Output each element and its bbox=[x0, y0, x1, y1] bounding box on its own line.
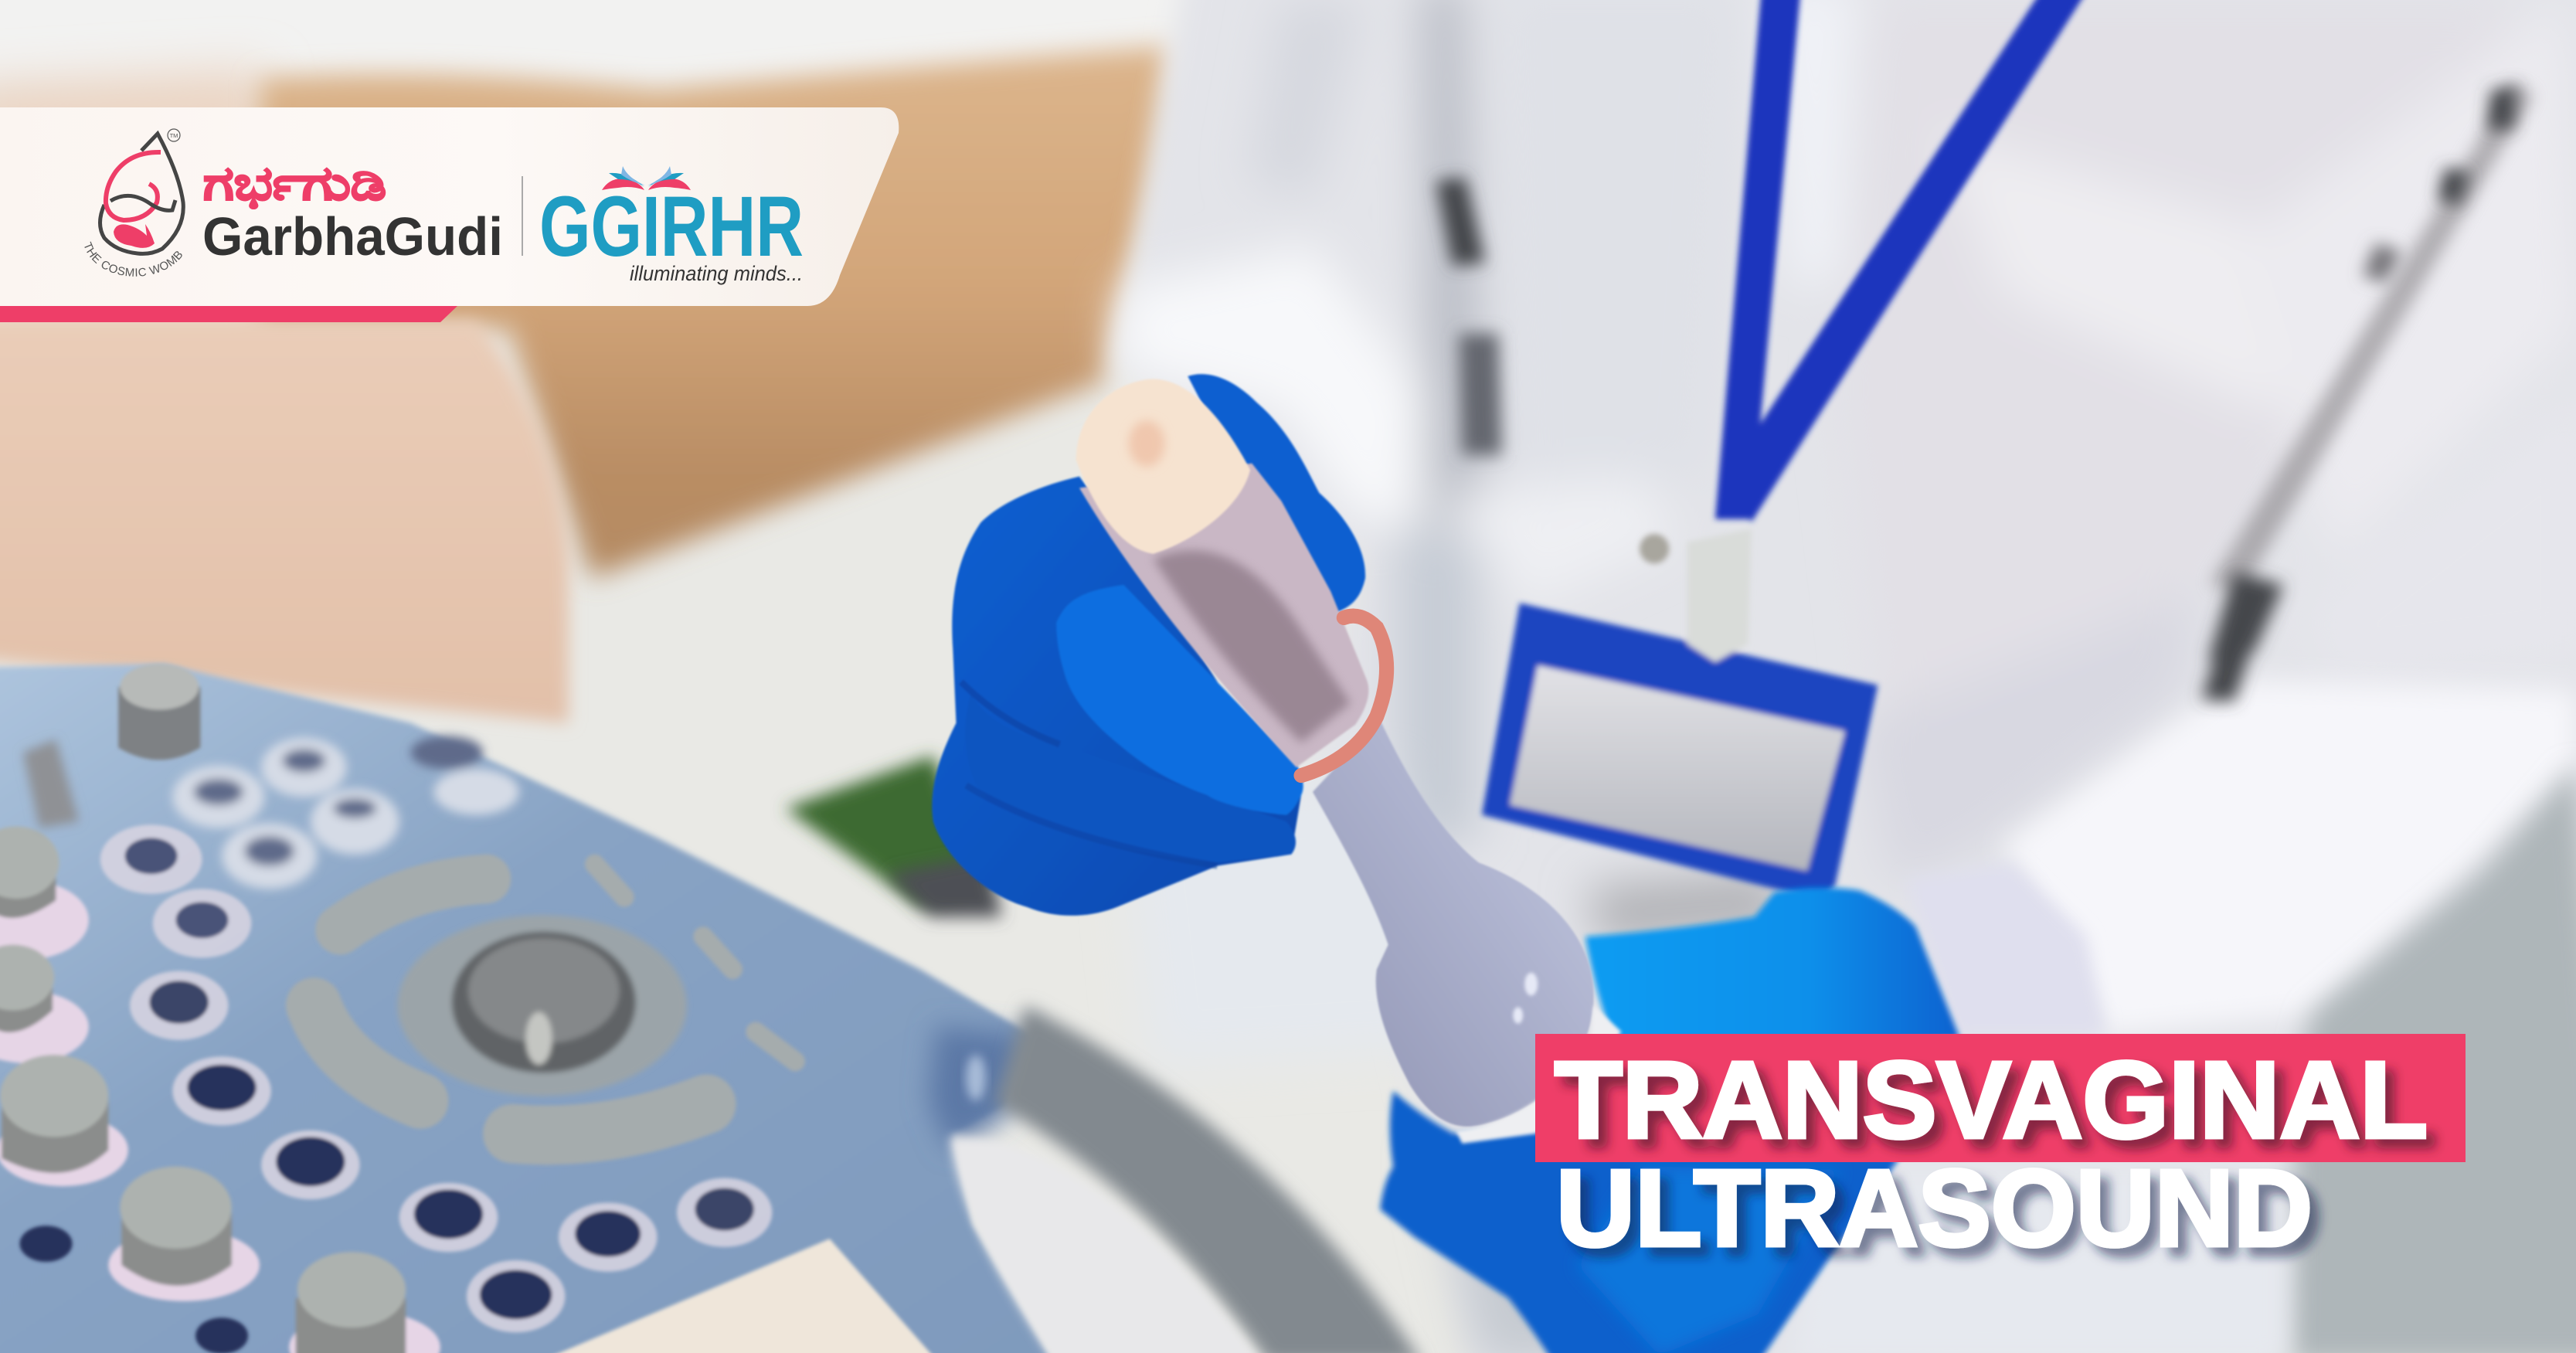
GGIRHR wordmark: GGIRHR bbox=[539, 179, 804, 274]
probe white collar bbox=[1456, 1005, 1622, 1144]
probe sheath bbox=[1079, 464, 1368, 767]
glove middle finger bbox=[965, 693, 1296, 862]
lanyard bbox=[1715, 0, 2086, 522]
emblem tagline: THE COSMIC WOMB bbox=[84, 241, 182, 277]
top wall bbox=[0, 0, 1249, 90]
control bars bbox=[314, 864, 795, 1135]
probe tip spot bbox=[1129, 420, 1165, 467]
title highlight box bbox=[1535, 1034, 2466, 1162]
keyboard paper label bbox=[534, 1239, 940, 1353]
round keys bbox=[20, 824, 772, 1353]
womb drop outline bbox=[100, 134, 183, 253]
title line 2: ULTRASOUND bbox=[1556, 1147, 2313, 1269]
dark wave bbox=[110, 195, 175, 210]
ultrasound console bbox=[0, 664, 1422, 1353]
wall bbox=[2289, 766, 2576, 1353]
sheath interior bbox=[1154, 550, 1351, 743]
sleeve seam bbox=[2210, 82, 2534, 591]
pink swirl bbox=[106, 152, 161, 220]
glove back fingers bbox=[1188, 374, 1365, 614]
glove cuff bbox=[1906, 862, 2106, 1035]
green floor mat bbox=[785, 756, 986, 907]
embryo bbox=[114, 224, 155, 248]
dark coat gaps bbox=[1436, 86, 2517, 702]
patient thigh bbox=[260, 46, 1170, 578]
lower coat bbox=[1791, 1167, 2287, 1353]
left pale skin bbox=[0, 69, 279, 345]
trademark mark bbox=[168, 129, 180, 141]
trademark mark: TM bbox=[170, 132, 178, 139]
probe tip bbox=[1076, 379, 1250, 554]
glove main bbox=[932, 477, 1301, 916]
glove index finger bbox=[1056, 585, 1303, 815]
tagline: illuminating minds... bbox=[630, 262, 803, 285]
lower hand wrist bbox=[1585, 888, 1960, 1052]
coat folds bbox=[1117, 0, 2576, 1353]
corner spot bbox=[966, 1055, 986, 1101]
rotary knobs bbox=[0, 664, 440, 1353]
upper gloved hand bbox=[932, 374, 1365, 916]
id badge bbox=[1482, 529, 1878, 900]
coat button bbox=[1640, 534, 1669, 563]
badge holder bbox=[1482, 603, 1878, 900]
console handle bbox=[996, 1005, 1422, 1353]
trackball bbox=[398, 915, 687, 1096]
badge card bbox=[1510, 665, 1845, 871]
title block bbox=[1535, 1034, 2466, 1269]
logo divider bbox=[522, 176, 523, 256]
console body bbox=[0, 664, 1055, 1353]
lower gloved hand bbox=[1380, 888, 1960, 1353]
white lab coat bbox=[1117, 0, 2576, 1353]
lower hand highlight bbox=[1577, 1167, 1840, 1353]
logo banner bbox=[0, 107, 899, 322]
console corner shade bbox=[928, 1027, 1031, 1150]
ultrasound probe body bbox=[1313, 719, 1594, 1127]
book icon bbox=[602, 166, 691, 190]
pink accent bar bbox=[0, 306, 457, 322]
sheath ring bbox=[1301, 616, 1387, 776]
Kannada wordmark: ಗರ್ಭಗುಡಿ bbox=[203, 158, 386, 209]
GarbhaGudi emblem bbox=[84, 128, 185, 277]
banner background bbox=[0, 107, 899, 306]
lower hand palm bbox=[1380, 1091, 1899, 1353]
patient belly bbox=[0, 321, 569, 723]
title line 1: TRANSVAGINAL bbox=[1555, 1039, 2428, 1161]
blurred upper keys bbox=[172, 736, 519, 889]
coat body bbox=[1117, 0, 2576, 1353]
badge clip bbox=[1687, 529, 1752, 662]
bright sleeve bbox=[2003, 680, 2576, 1035]
probe highlights bbox=[1513, 973, 1538, 1024]
dark floor gap bbox=[887, 855, 1002, 916]
handle inner opening bbox=[950, 1137, 1262, 1353]
GarbhaGudi wordmark: GarbhaGudi bbox=[202, 206, 503, 267]
glove finger shadows bbox=[961, 682, 1059, 744]
